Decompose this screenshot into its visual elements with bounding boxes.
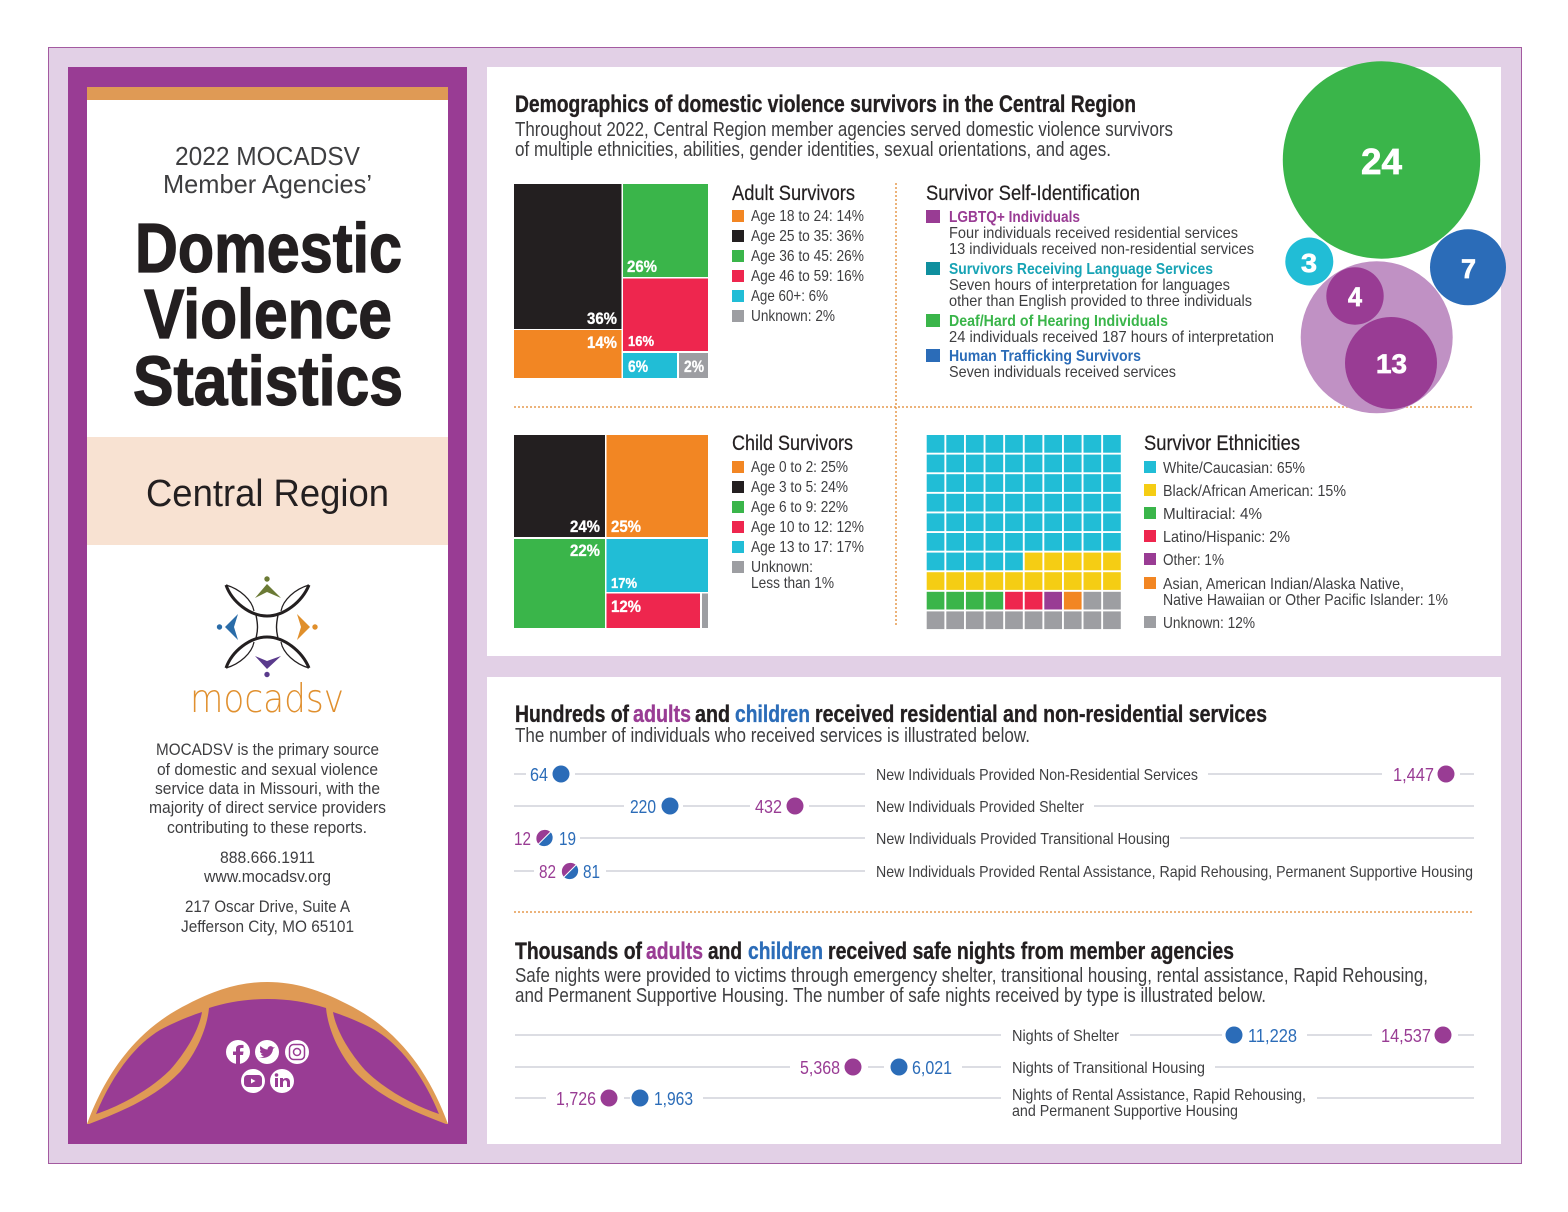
heading: safe nights: received safe nights from member agencies xyxy=(828,938,1234,965)
treemap: adult survivors: 6% xyxy=(628,357,648,376)
dot chart row: transitional housing: New Individuals Provided Transitional Housing xyxy=(876,831,1170,848)
legend: child survivors: Age 6 to 9: 22% xyxy=(751,499,848,516)
about text: of domestic and sexual violence xyxy=(157,760,378,779)
about text: majority of direct service providers xyxy=(149,798,386,817)
dotted divider xyxy=(515,911,1474,913)
treemap: adult survivors: 36% xyxy=(587,309,617,328)
contact details: Jefferson City, MO 65101 xyxy=(181,917,354,936)
legend: survivor ethnicities xyxy=(1144,432,1448,632)
block: survivor self-identification: Survivor Self-Identification xyxy=(926,182,1140,205)
bubbles: self-identification counts xyxy=(1283,61,1506,413)
region banner xyxy=(87,437,448,545)
dot chart row: nights of transitional housing: Nights of Transitional Housing xyxy=(1012,1060,1205,1077)
bubbles: self-identification counts: 13 xyxy=(1376,349,1407,379)
block: survivor self-identification: 24 individuals received 187 hours of interpretation xyxy=(949,329,1274,346)
legend: child survivors xyxy=(732,432,864,592)
dotted dividers xyxy=(515,184,1474,628)
dot chart row: non-residential services: 1,447 xyxy=(1393,765,1434,785)
block: survivor self-identification xyxy=(926,182,1274,381)
subtitle xyxy=(163,141,372,199)
panel: left sidebar xyxy=(68,67,467,1144)
title: Statistics xyxy=(133,342,403,420)
heading: residential and non-residential services: children xyxy=(735,701,810,728)
dot chart row: nights of rental assistance: 1,963 xyxy=(654,1089,693,1109)
block: survivor self-identification: Human Trafficking Survivors xyxy=(949,348,1141,365)
intro text xyxy=(515,119,1173,161)
legend: adult survivors: Age 46 to 59: 16% xyxy=(751,268,864,285)
dot chart row: shelter: 432 xyxy=(755,797,782,817)
dot chart row: transitional housing xyxy=(514,829,1474,849)
dot chart row: shelter: 220 xyxy=(630,797,656,817)
icon: facebook xyxy=(226,1040,250,1064)
legend: survivor ethnicities: Black/African American: 15% xyxy=(1163,483,1346,500)
panel: services xyxy=(487,677,1501,1144)
dot chart row: nights of rental assistance: Nights of Rental Assistance, Rapid Rehousing, xyxy=(1012,1087,1306,1104)
legend: child survivors: Unknown: xyxy=(751,559,813,576)
subheading: safe nights xyxy=(515,965,1428,1007)
treemap: child survivors: 24% xyxy=(570,517,600,536)
treemap: adult survivors: 16% xyxy=(628,333,654,350)
logo: mocadsv: mocadsv xyxy=(190,677,344,722)
legend: child survivors: Child Survivors xyxy=(732,432,853,455)
legend: child survivors: Age 3 to 5: 24% xyxy=(751,479,848,496)
heading: residential and non-residential services: adults xyxy=(633,701,691,728)
icon: instagram xyxy=(285,1040,309,1064)
dot chart row: nights of transitional housing: 6,021 xyxy=(912,1058,952,1078)
treemap: child survivors: 22% xyxy=(570,541,600,560)
legend: adult survivors: Unknown: 2% xyxy=(751,308,835,325)
legend: adult survivors: Adult Survivors xyxy=(732,182,855,205)
legend: survivor ethnicities: Latino/Hispanic: 2% xyxy=(1163,529,1290,546)
dome decoration xyxy=(87,982,448,1124)
dot chart row: non-residential services: New Individuals Provided Non-Residential Services xyxy=(876,767,1198,784)
panel: demographics xyxy=(487,61,1506,656)
dot chart row: rental assistance: 81 xyxy=(583,862,600,882)
heading: safe nights xyxy=(515,938,1234,965)
bubbles: self-identification counts: 4 xyxy=(1348,282,1362,312)
dot chart row: rental assistance: New Individuals Provided Rental Assistance, Rapid Rehousing, Permanent Supportive Housing xyxy=(876,864,1473,881)
legend: survivor ethnicities: Unknown: 12% xyxy=(1163,615,1255,632)
heading: safe nights: adults xyxy=(646,938,703,965)
heading: residential and non-residential services: and xyxy=(695,701,730,728)
title: Violence xyxy=(144,275,392,353)
legend: survivor ethnicities: Other: 1% xyxy=(1163,552,1224,569)
legend: survivor ethnicities: White/Caucasian: 65% xyxy=(1163,460,1305,477)
about text: service data in Missouri, with the xyxy=(155,779,380,798)
subtitle: 2022 MOCADSV xyxy=(175,141,361,171)
dot chart row: shelter: New Individuals Provided Shelter xyxy=(876,799,1085,816)
about text: MOCADSV is the primary source xyxy=(156,740,379,759)
subheading: safe nights: Safe nights were provided to victims through emergency shelter, transitional housing, rental assistance, Rapid Rehousing, xyxy=(515,965,1428,987)
block: survivor self-identification: Survivors Receiving Language Services xyxy=(949,261,1213,278)
legend: adult survivors: Age 25 to 35: 36% xyxy=(751,228,864,245)
treemap: adult survivors: 14% xyxy=(587,333,617,352)
contact details: 888.666.1911 xyxy=(220,848,315,867)
legend: adult survivors: Age 18 to 24: 14% xyxy=(751,208,864,225)
treemap: child survivors: 17% xyxy=(611,575,637,592)
treemap: adult survivors: 26% xyxy=(627,257,657,276)
dot chart row: nights of shelter: 14,537 xyxy=(1381,1026,1431,1046)
block: survivor self-identification: LGBTQ+ Individuals xyxy=(949,209,1080,226)
icon: linkedin xyxy=(270,1069,294,1093)
heading: safe nights: Thousands of xyxy=(515,938,643,965)
bubbles: self-identification counts: 7 xyxy=(1461,254,1476,284)
treemap: adult survivors xyxy=(514,184,708,378)
contact details: www.mocadsv.org xyxy=(203,867,331,886)
treemap: child survivors xyxy=(514,435,708,628)
dot chart row: rental assistance xyxy=(514,862,1473,882)
block: survivor self-identification: 13 individuals received non-residential services xyxy=(949,241,1254,258)
icon: youtube xyxy=(241,1069,265,1093)
treemap: adult survivors: 2% xyxy=(684,357,704,376)
heading: safe nights: children xyxy=(748,938,823,965)
dot chart row: nights of shelter: 11,228 xyxy=(1248,1026,1297,1046)
dot chart row: shelter xyxy=(514,797,1474,817)
about text xyxy=(149,740,386,837)
treemap: child survivors: 25% xyxy=(611,517,641,536)
legend: child survivors: Age 10 to 12: 12% xyxy=(751,519,864,536)
social icons xyxy=(226,1040,309,1093)
block: survivor self-identification: Seven hours of interpretation for languages xyxy=(949,277,1230,294)
dot chart row: nights of shelter xyxy=(515,1026,1474,1046)
heading: residential and non-residential services: received residential and non-residential services xyxy=(815,701,1267,728)
contact details: 217 Oscar Drive, Suite A xyxy=(185,897,351,916)
top accent bar xyxy=(87,87,448,100)
icon: twitter xyxy=(255,1040,279,1064)
dot chart row: non-residential services xyxy=(514,765,1474,785)
dot chart row: nights of transitional housing xyxy=(515,1058,1474,1078)
heading: safe nights: and xyxy=(708,938,742,965)
intro text: of multiple ethnicities, abilities, gender identities, sexual orientations, and ages. xyxy=(515,139,1111,161)
dot chart row: nights of rental assistance: 1,726 xyxy=(556,1089,596,1109)
legend: adult survivors: Age 60+: 6% xyxy=(751,288,828,305)
intro text: Throughout 2022, Central Region member agencies served domestic violence survivors xyxy=(515,119,1173,141)
legend: survivor ethnicities: Asian, American Indian/Alaska Native, xyxy=(1163,576,1404,593)
legend: adult survivors: Age 36 to 45: 26% xyxy=(751,248,864,265)
block: survivor self-identification: Deaf/Hard of Hearing Individuals xyxy=(949,313,1168,330)
dot chart row: rental assistance: 82 xyxy=(539,862,556,882)
title xyxy=(133,209,403,420)
title: Domestic xyxy=(135,209,402,287)
dot chart row: transitional housing: 19 xyxy=(559,829,576,849)
block: survivor self-identification: Four individuals received residential services xyxy=(949,225,1238,242)
legend: child survivors: Age 13 to 17: 17% xyxy=(751,539,864,556)
dot chart row: nights of rental assistance xyxy=(515,1087,1474,1120)
legend: survivor ethnicities: Survivor Ethnicities xyxy=(1144,432,1300,455)
contact details xyxy=(181,848,354,936)
subheading: services: The number of individuals who received services is illustrated below. xyxy=(515,725,1030,747)
treemap: child survivors: 12% xyxy=(611,597,641,616)
dot chart row: transitional housing: 12 xyxy=(514,829,531,849)
subheading: safe nights: and Permanent Supportive Housing. The number of safe nights received by type is illustrated below. xyxy=(515,985,1266,1007)
legend: survivor ethnicities: Multiracial: 4% xyxy=(1163,506,1262,523)
legend: adult survivors xyxy=(732,182,864,325)
legend: child survivors: Less than 1% xyxy=(751,575,834,592)
heading: residential and non-residential services: Hundreds of xyxy=(515,701,630,728)
dot chart row: nights of shelter: Nights of Shelter xyxy=(1012,1028,1120,1045)
block: survivor self-identification: other than English provided to three individuals xyxy=(949,293,1252,310)
region banner: Central Region xyxy=(146,473,389,515)
about text: contributing to these reports. xyxy=(167,818,367,837)
heading: residential and non-residential services xyxy=(515,701,1267,728)
waffle chart: survivor ethnicities xyxy=(927,435,1121,629)
dot chart row: non-residential services: 64 xyxy=(530,765,548,785)
subtitle: Member Agencies’ xyxy=(163,169,372,199)
block: survivor self-identification: Seven individuals received services xyxy=(949,364,1176,381)
dot chart row: nights of rental assistance: and Permanent Supportive Housing xyxy=(1012,1103,1238,1120)
bubbles: self-identification counts: 24 xyxy=(1361,141,1402,182)
legend: survivor ethnicities: Native Hawaiian or Other Pacific Islander: 1% xyxy=(1163,592,1448,609)
heading: demographics: Demographics of domestic violence survivors in the Central Region xyxy=(515,91,1136,118)
bubbles: self-identification counts: 3 xyxy=(1301,248,1317,278)
dot chart row: nights of transitional housing: 5,368 xyxy=(800,1058,840,1078)
logo: mocadsv xyxy=(190,576,344,722)
legend: child survivors: Age 0 to 2: 25% xyxy=(751,459,848,476)
